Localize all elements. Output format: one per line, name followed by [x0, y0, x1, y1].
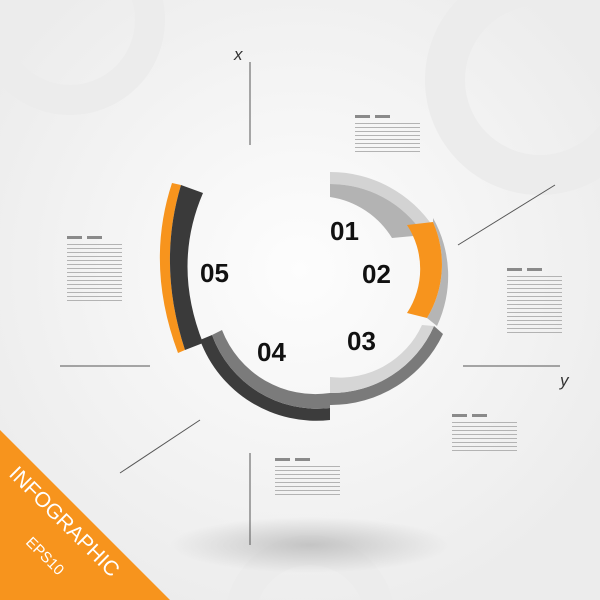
- numbers: 01: [330, 216, 359, 246]
- segment 3: [330, 325, 443, 405]
- axes lines: x: [233, 45, 243, 64]
- text block left: [67, 236, 122, 301]
- numbers: [200, 216, 391, 367]
- segment 1: [330, 172, 434, 238]
- segment 5: [160, 183, 203, 353]
- numbers: 04: [257, 337, 286, 367]
- text block bottom right: [452, 414, 517, 451]
- numbers: 02: [362, 259, 391, 289]
- axes lines: y: [559, 371, 570, 390]
- segment 4: [200, 330, 330, 421]
- segment 2: [407, 218, 448, 326]
- text block bottom: [275, 458, 340, 495]
- numbers: 03: [347, 326, 376, 356]
- text block top: [355, 115, 420, 152]
- orange corner banner: EPS10: [22, 534, 67, 579]
- orange corner banner: INFOGRAPHIC: [4, 462, 124, 582]
- numbers: 05: [200, 258, 229, 288]
- text block right: [507, 268, 562, 333]
